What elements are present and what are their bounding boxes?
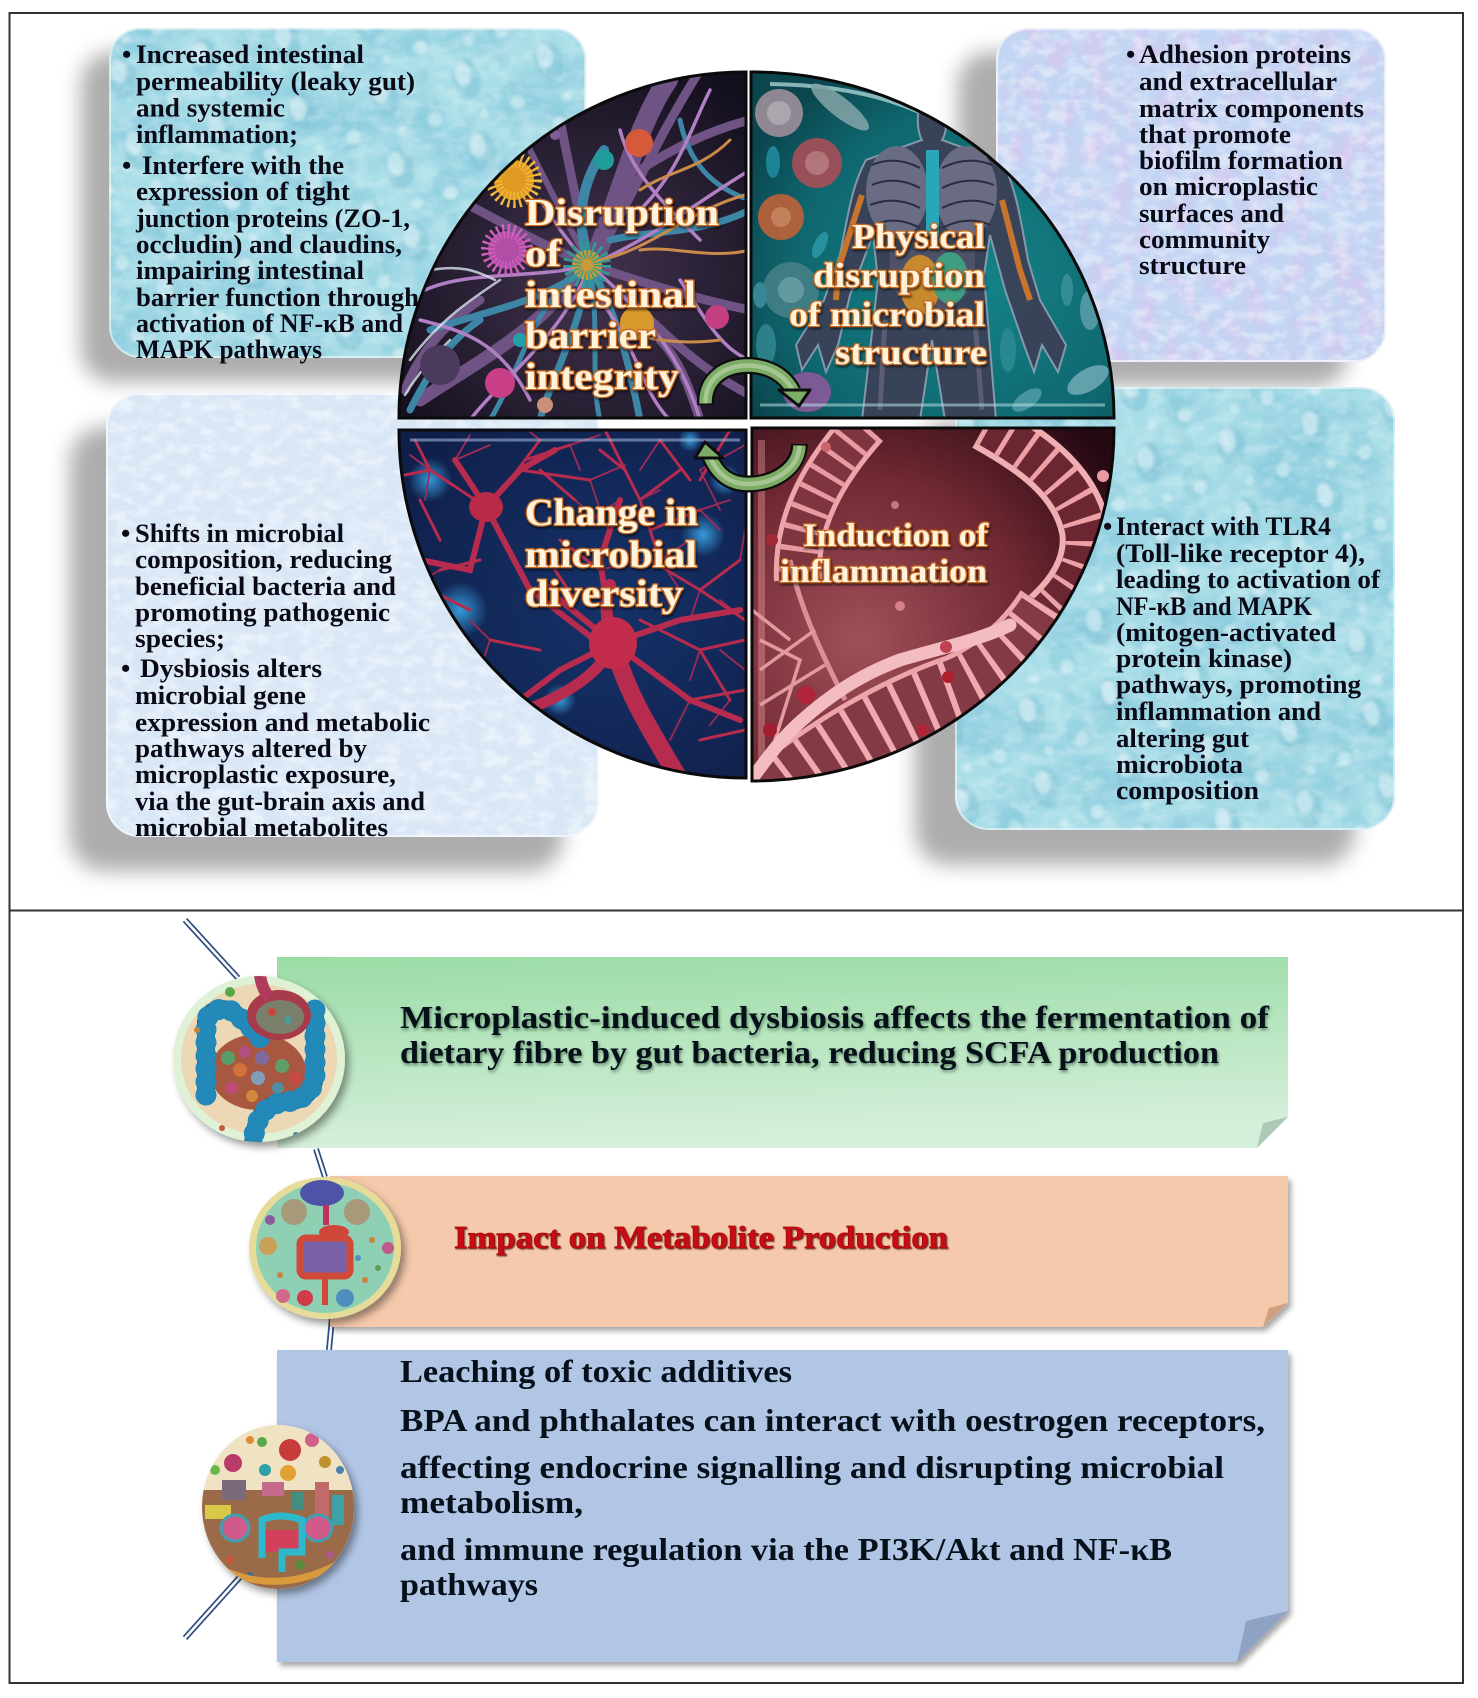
text block: microbial diversity effects: expression and metabolic [135, 707, 430, 737]
text block: inflammation effects: composition [1116, 775, 1259, 805]
text block: leaching of toxic additives: Leaching of toxic additives [400, 1354, 792, 1389]
text block: microbial structure effects: matrix components [1139, 93, 1364, 123]
heading: induction of inflammation: inflammation [780, 554, 987, 590]
heading: change in microbial diversity: diversity [525, 573, 683, 615]
text block: inflammation effects [1103, 511, 1381, 805]
heading: physical disruption of microbial structure [789, 217, 987, 372]
text block: intestinal barrier effects: Interfere with the [142, 150, 344, 180]
text block: inflammation effects: (mitogen-activated [1116, 617, 1336, 647]
text block: green banner message: Microplastic-induced dysbiosis affects the fermentation of [400, 1000, 1270, 1035]
text block: intestinal barrier effects: MAPK pathways [136, 334, 322, 364]
fold corner [1257, 1117, 1288, 1148]
text block: intestinal barrier effects: barrier function through [136, 282, 419, 312]
arrow: clockwise top arrow [705, 366, 810, 406]
icon: gut illustration [173, 975, 345, 1145]
icon: gut-brain illustration [249, 1177, 401, 1330]
heading: disruption of intestinal barrier integrity: intestinal [525, 274, 696, 316]
heading: physical disruption of microbial structure: of microbial [789, 295, 985, 334]
text block: leaching of toxic additives: metabolism, [400, 1485, 583, 1520]
text block: microbial diversity effects: beneficial bacteria and [135, 571, 396, 601]
heading: disruption of intestinal barrier integrity: Disruption [525, 192, 719, 234]
text block: microbial structure effects: Adhesion proteins [1139, 39, 1351, 69]
heading: change in microbial diversity: Change in [525, 492, 698, 534]
text block: intestinal barrier effects: impairing intestinal [136, 255, 364, 285]
microbes around the body [753, 77, 1113, 416]
text block: intestinal barrier effects [122, 39, 419, 364]
text block: microbial structure effects [1126, 39, 1364, 280]
panel: blue banner [277, 1350, 1288, 1662]
text block: inflammation effects: leading to activation of [1116, 564, 1381, 594]
connector line through icons [185, 920, 332, 1638]
text block: microbial diversity effects [121, 518, 430, 842]
text block: microbial diversity effects: microbial metabolites [135, 812, 388, 842]
quadrant image: microbes and strands [399, 70, 750, 420]
text block: intestinal barrier effects: junction proteins (ZO-1, [135, 203, 410, 233]
text block: intestinal barrier effects: and systemic [136, 92, 285, 122]
quadrant image: DNA helix [752, 425, 1114, 800]
text block: inflammation effects: microbiota [1116, 749, 1243, 779]
panel: green banner [277, 957, 1288, 1148]
panel: peach banner [330, 1176, 1288, 1327]
heading: change in microbial diversity: microbial [525, 534, 697, 576]
text block: microbial diversity effects: Dysbiosis alters [140, 653, 322, 683]
text block: microbial diversity effects: Shifts in microbial [135, 518, 344, 548]
text block: microbial diversity effects: • [121, 518, 130, 548]
text block: microbial diversity effects: • [121, 653, 130, 683]
text block: microbial structure effects: community [1139, 224, 1270, 254]
text block: intestinal barrier effects: inflammation; [136, 119, 298, 149]
text block: inflammation effects: altering gut [1116, 723, 1249, 753]
text block: inflammation effects: pathways, promoting [1116, 669, 1361, 699]
heading: physical disruption of microbial structure: Physical [852, 217, 985, 256]
heading: physical disruption of microbial structure: structure [835, 333, 987, 372]
text block: inflammation effects: inflammation and [1116, 696, 1321, 726]
heading: impact on metabolite production: Impact on Metabolite Production [454, 1220, 949, 1255]
icon: metabolic illustration [200, 1425, 356, 1590]
panel: inflammation card [915, 387, 1395, 865]
panel: microbial diversity card [70, 393, 599, 871]
text block: microbial structure effects: on microplastic [1139, 171, 1318, 201]
text block: intestinal barrier effects: activation of NF-κB and [136, 308, 403, 338]
text block: microbial structure effects: • [1126, 39, 1135, 69]
text block: intestinal barrier effects: occludin) and claudins, [136, 229, 402, 259]
heading: disruption of intestinal barrier integrity: barrier [525, 315, 656, 357]
text block: microbial diversity effects: microplastic exposure, [135, 759, 396, 789]
heading: physical disruption of microbial structure: disruption [813, 256, 985, 295]
text block: microbial diversity effects: pathways altered by [135, 733, 367, 763]
text block: leaching of toxic additives: BPA and phthalates can interact with oestrogen receptors, [400, 1403, 1265, 1438]
heading: disruption of intestinal barrier integrity [525, 192, 719, 398]
text block: microbial structure effects: and extracellular [1139, 66, 1337, 96]
text block: intestinal barrier effects: • [122, 39, 131, 69]
text block: intestinal barrier effects: permeability (leaky gut) [136, 66, 415, 96]
text block: inflammation effects: (Toll-like receptor 4), [1116, 538, 1365, 568]
text block: inflammation effects: protein kinase) [1116, 643, 1292, 673]
text block: microbial structure effects: structure [1139, 250, 1246, 280]
text block: inflammation effects: NF-κB and MAPK [1116, 591, 1312, 621]
panel: intestinal barrier card [81, 28, 586, 382]
heading: disruption of intestinal barrier integrity: of [525, 233, 563, 275]
text block: leaching of toxic additives: and immune regulation via the PI3K/Akt and NF-κB [400, 1532, 1172, 1567]
text block: intestinal barrier effects: expression of tight [136, 176, 350, 206]
text block: microbial diversity effects: species; [135, 623, 225, 653]
text block: green banner message: dietary fibre by gut bacteria, reducing SCFA production [400, 1035, 1220, 1070]
text block: intestinal barrier effects: • [122, 150, 131, 180]
arrow: clockwise bottom arrow [695, 442, 800, 484]
text block: microbial diversity effects: microbial gene [135, 680, 306, 710]
text block: microbial diversity effects: promoting pathogenic [135, 597, 390, 627]
heading: induction of inflammation: Induction of [803, 518, 989, 554]
text block: microbial structure effects: that promote [1139, 119, 1291, 149]
text block: inflammation effects: • [1103, 511, 1112, 541]
text block: leaching of toxic additives: pathways [400, 1567, 538, 1602]
text block: intestinal barrier effects: Increased intestinal [136, 39, 364, 69]
heading: change in microbial diversity [525, 492, 698, 615]
heading: disruption of intestinal barrier integrity: integrity [525, 356, 679, 398]
panel: microbial structure card [958, 28, 1386, 386]
text block: microbial structure effects: biofilm formation [1139, 145, 1343, 175]
text block: leaching of toxic additives: affecting endocrine signalling and disrupting microbial [400, 1450, 1224, 1485]
text block: microbial diversity effects: via the gut-brain axis and [135, 786, 425, 816]
heading: induction of inflammation [780, 518, 989, 590]
quadrant image: human body and microbes [751, 72, 1114, 420]
text block: green banner message [400, 1000, 1270, 1070]
text block: microbial diversity effects: composition, reducing [135, 544, 392, 574]
quadrant image: red neurons [399, 428, 746, 780]
text block: microbial structure effects: surfaces and [1139, 198, 1284, 228]
text block: inflammation effects: Interact with TLR4 [1116, 511, 1331, 541]
text block: leaching of toxic additives [400, 1354, 1265, 1602]
